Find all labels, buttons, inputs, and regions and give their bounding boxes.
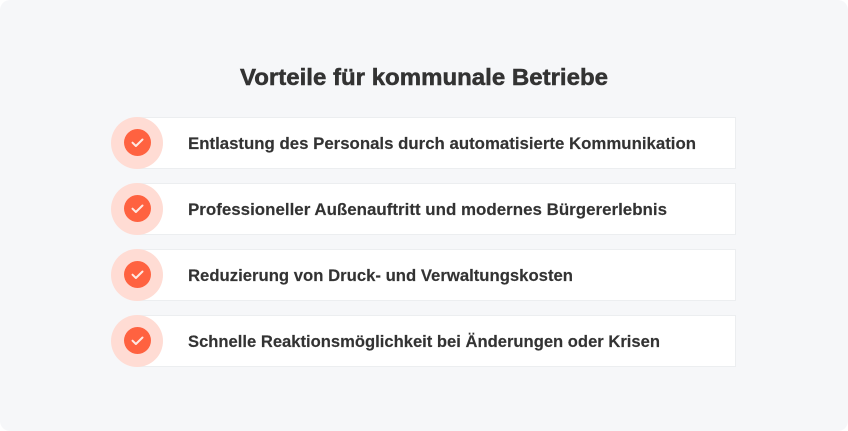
icon: check 2 <box>111 183 163 235</box>
icon: check 3 <box>111 249 163 301</box>
card 3 <box>138 250 736 300</box>
card 4 <box>138 316 736 366</box>
list item 3 <box>111 249 736 301</box>
text 1: Entlastung des Personals durch automatisierte Kommunikation <box>188 134 696 153</box>
icon: check 4 <box>111 315 163 367</box>
list item 2 <box>111 183 736 235</box>
list item 1 <box>111 117 736 169</box>
list item 4 <box>111 315 736 367</box>
card 2 <box>138 184 736 234</box>
text 4: Schnelle Reaktionsmöglichkeit bei Änderungen oder Krisen <box>188 332 660 351</box>
text 3: Reduzierung von Druck- und Verwaltungskosten <box>188 266 573 285</box>
card 1 <box>138 118 736 168</box>
text 2: Professioneller Außenauftritt und modernes Bürgererlebnis <box>188 200 667 219</box>
icon: check 1 <box>111 117 163 169</box>
title: Vorteile für kommunale Betriebe <box>240 64 608 90</box>
